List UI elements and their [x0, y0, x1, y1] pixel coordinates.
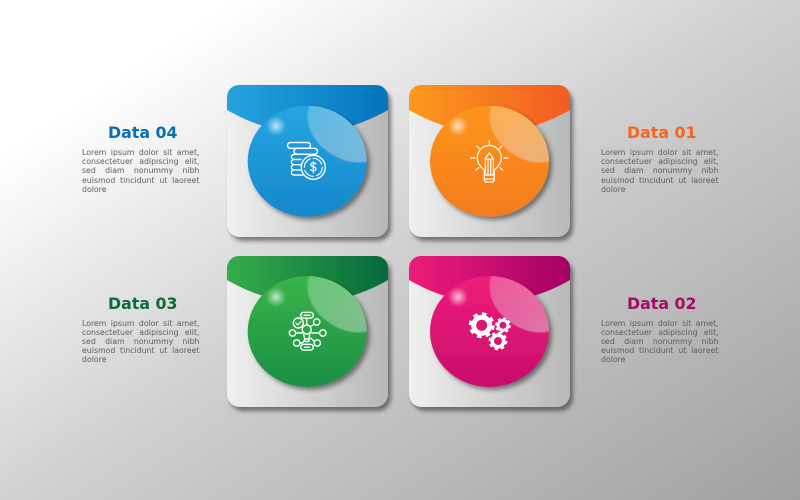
- body: Data 04: Lorem ipsum dolor sit amet,: [82, 148, 200, 157]
- body: Data 03: [82, 318, 200, 364]
- body: Data 02: consectetuer adipiscing elit,: [601, 328, 718, 337]
- body: Data 03: sed diam nonummy nibh: [82, 337, 200, 346]
- body: Data 03: euismod tincidunt ut laoreet: [82, 346, 200, 355]
- body: Data 02: euismod tincidunt ut laoreet: [601, 346, 718, 355]
- body: Data 01: [601, 148, 718, 194]
- panel: card Data 01: [409, 85, 570, 237]
- icon: coins with dollar: [288, 142, 325, 179]
- icon: light bulb with pencil: [471, 141, 508, 182]
- body: Data 03: dolore: [82, 355, 106, 364]
- body: Data 04: consectetuer adipiscing elit,: [82, 157, 200, 166]
- infographic cards: [227, 85, 576, 414]
- body: Data 04: [82, 148, 200, 194]
- body: Data 01: dolore: [601, 185, 626, 194]
- icon: idea network: [289, 312, 326, 350]
- text block: Data 01: [601, 123, 718, 194]
- text block: Data 02: [601, 294, 718, 364]
- body: Data 04: sed diam nonummy nibh: [82, 166, 200, 175]
- panel: card Data 02: [409, 256, 570, 407]
- body: Data 01: sed diam nonummy nibh: [601, 166, 718, 175]
- text block: Data 04: [82, 123, 200, 194]
- body: Data 01: euismod tincidunt ut laoreet: [601, 176, 718, 185]
- body: Data 03: consectetuer adipiscing elit,: [82, 328, 200, 337]
- body: Data 02: Lorem ipsum dolor sit amet,: [601, 318, 718, 328]
- body: Data 01: consectetuer adipiscing elit,: [601, 157, 718, 166]
- heading: Data 04: Data 04: [108, 123, 177, 142]
- body: Data 02: dolore: [601, 355, 626, 364]
- body: Data 04: dolore: [82, 185, 106, 194]
- body: Data 03: Lorem ipsum dolor sit amet,: [82, 318, 200, 328]
- body: Data 01: Lorem ipsum dolor sit amet,: [601, 148, 718, 157]
- body: Data 04: euismod tincidunt ut laoreet: [82, 176, 200, 185]
- text block: Data 03: [82, 294, 200, 364]
- heading: Data 02: Data 02: [627, 294, 696, 312]
- body: Data 02: [601, 318, 718, 364]
- panel: card Data 03: [227, 256, 388, 407]
- icon: gears: [470, 314, 510, 349]
- heading: Data 03: Data 03: [108, 294, 177, 312]
- panel: card Data 04: [227, 85, 388, 237]
- body: Data 02: sed diam nonummy nibh: [601, 337, 718, 346]
- heading: Data 01: Data 01: [627, 123, 696, 142]
